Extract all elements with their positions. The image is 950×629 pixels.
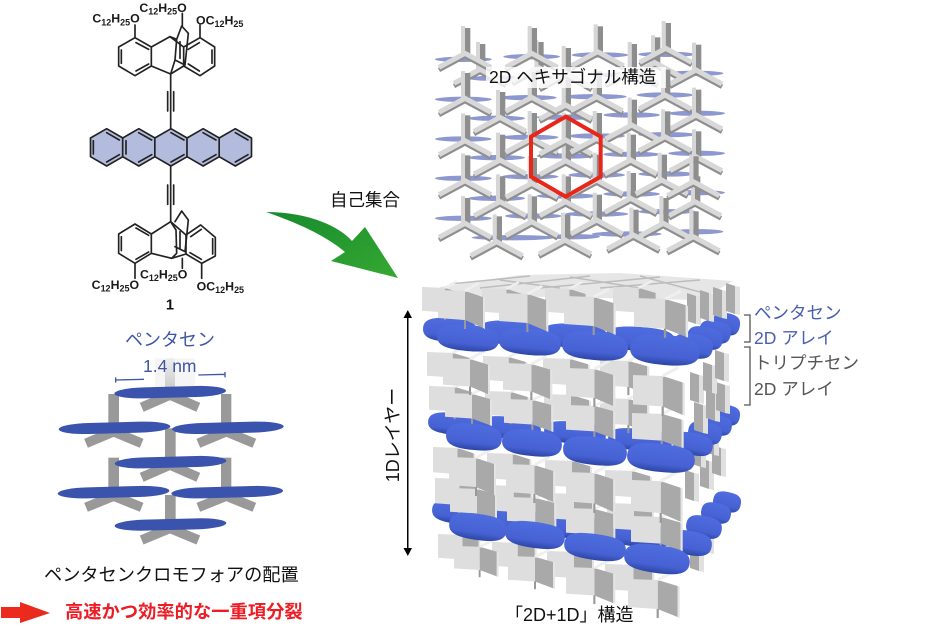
- pentacene core: [90, 129, 251, 166]
- arrow: self-assembly green: [266, 212, 398, 278]
- blue pentacene layer 2 back row: [427, 403, 742, 459]
- label: triptycene 2D array: [754, 353, 859, 399]
- caption: 2D+1D structure: 「2D+1D」構造: [505, 605, 634, 625]
- alkyl chain labels: 25: [234, 285, 244, 295]
- bracket: pentacene array: [744, 315, 750, 342]
- lower triptycene with alkyne: [119, 166, 215, 278]
- alkyl chain labels: 12: [101, 17, 111, 27]
- alkyl chain labels: H: [159, 267, 168, 281]
- alkyl chain labels: [92, 1, 244, 295]
- layer 1 triptycene: [422, 276, 740, 338]
- label: triptycene 2D array: 2D アレイ: [754, 379, 834, 399]
- alkyl chain labels: O: [129, 278, 139, 292]
- alkyl chain labels: 25: [168, 273, 178, 283]
- alkyl chain labels: C: [92, 278, 101, 292]
- alkyl chain labels: O: [130, 12, 140, 26]
- alkyl chain labels: 12: [101, 284, 111, 294]
- conclusion: fast and efficient singlet fission: 高速かつ効率的な一重項分裂: [65, 601, 303, 622]
- blue pentacene ellipses: [58, 385, 284, 531]
- layer 3 triptycene: [429, 380, 730, 449]
- 2D hexagonal lattice: [435, 21, 725, 258]
- bracket: triptycene array: [744, 347, 750, 405]
- layer 2 triptycene: [427, 346, 729, 416]
- alkyl chain labels: C: [139, 1, 148, 15]
- blue pentacene layer 1: [422, 310, 742, 368]
- blue pentacene layer 2 front row: [445, 421, 696, 475]
- alkyl chain labels: C: [140, 267, 149, 281]
- alkyl chain labels: 12: [149, 273, 159, 283]
- compound 1 chemical structure: [90, 1, 251, 314]
- label: self-assembly: 自己集合: [330, 190, 400, 210]
- compound number: 1: [166, 298, 174, 314]
- faded stem behind 1.4 nm label: [155, 358, 195, 388]
- alkyl chain labels: O: [178, 267, 188, 281]
- label: pentacene 2D array: [754, 303, 842, 348]
- alkyl chain labels: 25: [167, 7, 177, 17]
- alkyl chain labels: OC: [196, 13, 214, 27]
- alkyl chain labels: 25: [119, 284, 129, 294]
- alkyl chain labels: H: [225, 279, 234, 293]
- 1.4 nm width marker: [116, 372, 225, 383]
- label: pentacene: ペンタセン: [125, 330, 215, 350]
- heading box: 2D hexagonal structure: 2D ヘキサゴナル構造: [489, 67, 656, 87]
- alkyl chain labels: C: [92, 12, 101, 26]
- label: triptycene 2D array: トリプチセン: [754, 353, 859, 373]
- upper triptycene with alkyne: [119, 13, 215, 129]
- pentacene chromophore arrangement diagram: [58, 358, 284, 540]
- grey triptycene units: [86, 394, 254, 540]
- layer 1 top surface: [440, 273, 733, 300]
- alkyl chain labels: 12: [214, 19, 224, 29]
- blue pentacene layer 3: [431, 489, 743, 559]
- label: pentacene 2D array: ペンタセン: [754, 303, 842, 323]
- alkyl chain labels: 12: [148, 7, 158, 17]
- alkyl chain labels: 25: [120, 17, 130, 27]
- arrow: 1D layer axis: [404, 310, 412, 556]
- layer 4 triptycene: [433, 424, 719, 523]
- label: 1D layer: 1Dレイヤー: [383, 388, 403, 482]
- red hexagon: [531, 117, 601, 197]
- layer 6 triptycene: [438, 522, 714, 618]
- alkyl chain labels: H: [158, 1, 167, 15]
- label: pentacene 2D array: 2D アレイ: [754, 328, 834, 348]
- caption: chromophore arrangement: ペンタセンクロモフォアの配置: [44, 565, 299, 585]
- alkyl chain labels: H: [111, 12, 120, 26]
- alkyl chain labels: H: [224, 13, 233, 27]
- label: 1.4 nm: 1.4 nm: [143, 356, 196, 376]
- alkyl chain labels: 12: [215, 285, 225, 295]
- alkyl chain labels: OC: [197, 279, 215, 293]
- alkyl chain labels: 25: [233, 19, 243, 29]
- grey triptycene tripods: [439, 21, 722, 258]
- layer 5 triptycene: [435, 445, 726, 552]
- icon: red arrow: [1, 602, 50, 623]
- alkyl chain labels: O: [177, 1, 187, 15]
- alkyl chain labels: H: [111, 278, 120, 292]
- blue pentacene layer 3 front row: [447, 510, 692, 577]
- light blue pentacene rows: [435, 52, 725, 240]
- 2D+1D stacked structure: [422, 273, 743, 618]
